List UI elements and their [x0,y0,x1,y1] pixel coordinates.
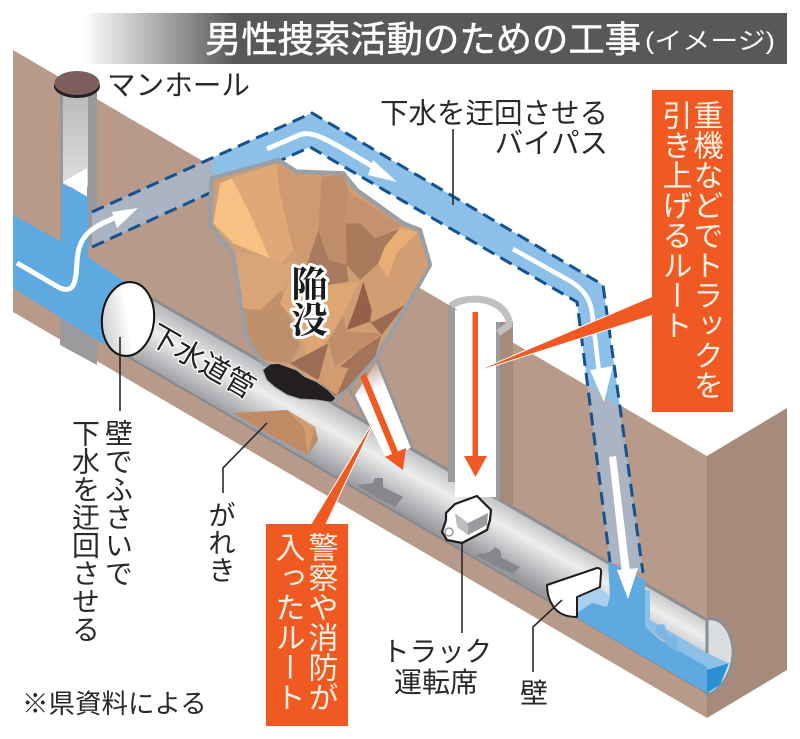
callout text: 警察や消防が [304,532,338,712]
orange diagonal arrow [360,368,406,470]
label: truck cab: トラック [382,636,492,667]
pipe opening blocked by wall [98,279,158,359]
debris piles [357,478,520,574]
label: truck cab: 運転席 [394,667,478,698]
label: truck cab [382,636,492,698]
label: sinkhole: 陥没 [287,265,327,337]
water upstream [13,183,125,355]
callout: heavy machinery route [483,90,733,412]
callout: police and fire route [266,423,373,726]
sinkhole [210,160,430,402]
callout text second column: 引き上げるルート [658,100,692,340]
callout text second column: 入ったルート [270,532,304,712]
label: bypass: バイパス [495,128,608,160]
manhole shaft [60,90,97,245]
label: manhole: マンホール [107,70,250,102]
wall right face [707,408,787,718]
title bar [83,13,787,64]
leader lines [120,129,562,672]
label: wall: 壁 [520,678,548,709]
black debris [263,363,336,402]
rescue route passage [348,360,412,470]
truck cab [442,496,491,543]
sewer pipe [125,283,733,695]
vertical shaft [448,299,513,508]
callout text: 重機などでトラックを [688,100,724,400]
pipe end rim [707,619,733,695]
bypass pipe [92,113,643,573]
dividing wall [547,568,601,617]
title note: (イメージ) [645,28,775,55]
label: wall closure [69,419,133,643]
lower manhole shaft [60,312,97,365]
label: wall closure: 下水を迂回させる [69,419,100,643]
orange down arrow [464,312,487,477]
source note: ※県資料による [22,689,207,719]
title text: 男性捜索活動のための工事 [205,19,641,60]
label: rubble: がれき [204,501,235,584]
water downstream [577,562,729,693]
label: wall closure: 壁でふさいで [102,419,133,587]
label: bypass: 下水を迂回させる [380,98,608,130]
manhole cover [54,71,100,98]
label: sewer pipe: 下水道管 [144,318,260,405]
water flow arrows [17,134,638,599]
rubble [233,410,318,455]
label: bypass [380,98,608,160]
